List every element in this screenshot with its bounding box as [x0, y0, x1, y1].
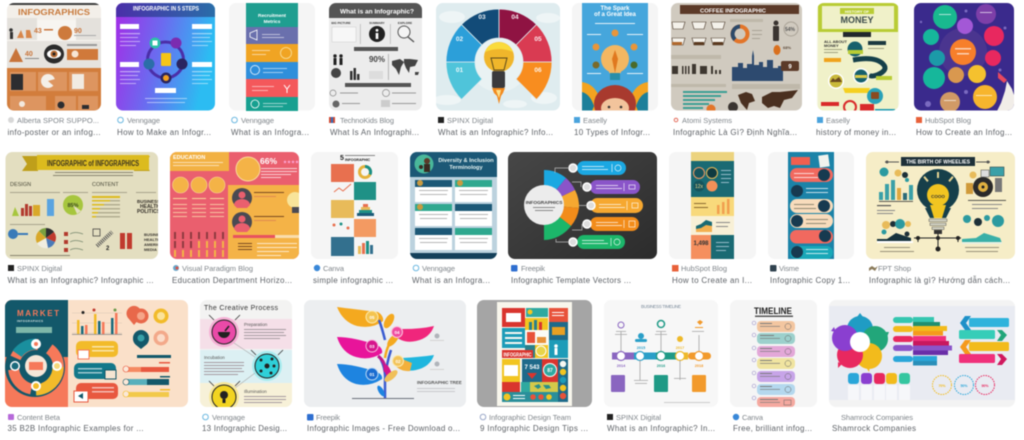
result card: Alberta SPOR info-poster — [7, 3, 101, 137]
thumbnail: business timeline — [604, 300, 718, 407]
caption: Infographic Là Gì? Định Nghĩa... — [673, 128, 797, 137]
result card: Infographic Design Team poster — [477, 300, 592, 433]
thumbnail: history of money: MONEY — [840, 15, 874, 25]
thumbnail: spark of a great idea: The Spark — [600, 6, 630, 12]
thumbnail: gray infographic: What is an Infographic? — [340, 8, 414, 16]
result card: SPINX light bulb ring — [433, 3, 560, 137]
thumbnail: history of money: HISTORY OF — [845, 9, 870, 14]
caption: What is an Infogra... — [412, 276, 490, 285]
caption — [869, 264, 1010, 285]
thumbnail: creative process: Illumination — [244, 389, 267, 394]
result card: SPINX business timeline — [604, 300, 718, 433]
thumbnail: creative process: Incubation — [204, 355, 225, 360]
result card: Content Beta market infographic — [5, 300, 188, 433]
caption: Venngage — [212, 413, 245, 422]
caption — [412, 264, 490, 285]
thumbnail: infographic tree: 03 — [369, 344, 375, 349]
thumbnail: infographic of infographics: AMERICA — [144, 242, 163, 247]
caption — [231, 116, 309, 137]
thumbnail: tall teal and yellow infographic: 1,498 — [693, 241, 709, 247]
caption: Shamrock Companies — [841, 413, 913, 422]
thumbnail: tall teal and yellow infographic — [669, 152, 756, 259]
thumbnail: mosaic poster on gray: INFOGRAPHIC — [504, 352, 532, 358]
thumbnail: coffee infographic: 54% — [785, 27, 796, 33]
thumbnail: history of money — [817, 3, 899, 113]
thumbnail: diversity and inclusion terminology: Diversity & Inclusion — [438, 158, 494, 164]
result card: TechnoKids what is an infographic — [329, 3, 422, 137]
thumbnail: six segment ring with rocket bulb: 02 — [456, 36, 463, 43]
caption: Infographic Template Vectors ... — [511, 276, 631, 285]
caption: Free, brilliant infog... — [733, 424, 812, 433]
thumbnail: education department horizontal: ★★★★ — [283, 159, 299, 164]
caption: Easelly — [583, 116, 607, 125]
thumbnail: business timeline: 2016 — [657, 364, 665, 368]
thumbnail: gray infographic: EXPLORE — [398, 21, 412, 25]
thumbnail: petals, bars and arrows: 90% — [981, 384, 989, 388]
result card: Visme infographic copy — [768, 152, 854, 285]
caption — [8, 116, 100, 137]
caption: SPINX Digital — [616, 413, 661, 422]
thumbnail: recruitment metrics: Metrics — [264, 19, 281, 25]
thumbnail: mosaic poster on gray — [477, 300, 592, 407]
thumbnail: infographic of infographics: HEALTH — [140, 204, 160, 210]
result card: Easelly history of money — [816, 3, 899, 137]
caption — [117, 116, 211, 137]
thumbnail: orange infographics poster: INFOGRAPHICS — [18, 8, 91, 17]
thumbnail: coffee infographic: 9 — [788, 64, 792, 70]
thumbnail: tall blue with pills — [768, 152, 854, 259]
thumbnail: business timeline: BUSINESS TIMELINE — [641, 304, 681, 309]
result card: Venngage diversity and inclusion — [410, 152, 497, 285]
thumbnail: spark of a great idea — [572, 3, 658, 123]
caption — [8, 413, 144, 433]
thumbnail: business timeline: 2018 — [695, 364, 703, 368]
caption: Venngage — [241, 116, 274, 125]
caption — [438, 116, 553, 137]
thumbnail: education department horizontal: EDUCATION — [173, 155, 205, 161]
caption — [916, 116, 1012, 137]
thumbnail: birth of wheelies light bulb: COOO — [931, 194, 945, 199]
caption: history of money in... — [816, 128, 896, 137]
thumbnail: market infographic: INFOGRAPHICS — [17, 319, 43, 323]
caption — [8, 264, 154, 285]
thumbnail: diversity and inclusion terminology — [410, 152, 497, 259]
thumbnail: business timeline: 2017 — [676, 346, 684, 350]
caption: How to Create an Infog... — [916, 128, 1012, 137]
thumbnail: business timeline: 2015 — [637, 346, 645, 350]
caption — [329, 116, 419, 137]
thumbnail: infographic of infographics: 2 — [106, 246, 110, 252]
thumbnail: simple colored blocks — [311, 152, 398, 259]
caption: 35 B2B Infographic Examples for ... — [8, 424, 144, 433]
caption — [832, 413, 916, 433]
caption: SPINX Digital — [447, 116, 493, 125]
caption — [480, 413, 588, 433]
thumbnail: six segment ring with rocket bulb: 06 — [534, 67, 542, 74]
thumbnail: six segment ring with rocket bulb: 01 — [456, 67, 463, 74]
ring segments — [446, 9, 552, 100]
caption — [172, 264, 292, 285]
caption: FPT Shop — [878, 264, 911, 273]
caption: info-poster or an infog... — [8, 128, 100, 137]
thumbnail: infographic of infographics: POLITICS — [137, 209, 161, 215]
caption — [202, 413, 287, 433]
result card: Visual Paradigm education — [170, 152, 303, 285]
result card: Easelly spark of a great idea — [572, 3, 658, 137]
caption: Canva — [323, 264, 345, 273]
thumbnail: birth of wheelies light bulb — [866, 152, 1015, 259]
result card: Canva simple infographic — [311, 152, 398, 285]
thumbnail: gray infographic: 90% — [369, 55, 385, 64]
caption: Education Department Horizo... — [172, 276, 292, 285]
caption: What Is An Infographi... — [330, 128, 419, 137]
caption: Infographic Design Team — [489, 413, 571, 422]
thumbnail: five step purple gradient: INFOGRAPHIC IN 5 STEPS — [133, 6, 200, 12]
result card: FPT Shop birth of wheelies — [866, 152, 1015, 285]
result card: Venngage creative process — [200, 300, 292, 433]
thumbnail: timeline design process: TIMELINE — [754, 306, 792, 317]
thumbnail: creative process: The Creative Process — [204, 305, 278, 312]
caption: 9 Infographic Design Tips ... — [480, 424, 588, 433]
thumbnail: infographic tree — [304, 300, 466, 407]
caption — [574, 116, 650, 137]
caption: What is an Infographic? Info... — [438, 128, 553, 137]
thumbnail: six segment ring with rocket bulb — [433, 3, 560, 111]
caption: HubSpot Blog — [925, 116, 971, 125]
result card: Venngage recruitment metrics — [229, 3, 315, 137]
thumbnail: diversity and inclusion terminology: Terminology — [449, 165, 483, 171]
thumbnail: gray infographic: BIG PICTURE — [331, 21, 351, 25]
thumbnail: creative process — [200, 300, 292, 412]
caption: Visual Paradigm Blog — [182, 264, 253, 273]
result card: Venngage 5 steps — [116, 3, 215, 137]
thumbnail: market infographic — [5, 300, 188, 407]
thumbnail: mosaic poster on gray: 7 543 — [524, 365, 540, 371]
caption: Venngage — [127, 116, 160, 125]
caption: What is an Infographic? Infographic ... — [8, 276, 154, 285]
caption — [607, 413, 715, 433]
caption — [511, 264, 631, 285]
caption: What is an Infographic? In... — [607, 424, 715, 433]
thumbnail: recruitment metrics — [229, 3, 315, 111]
caption: Freepik — [521, 264, 545, 273]
result card: HubSpot bubble infographic — [914, 3, 1014, 137]
thumbnail: gray infographic — [329, 3, 422, 111]
thumbnail: infographic of infographics: CONTENT — [92, 182, 119, 188]
caption: Shamrock Companies — [832, 424, 916, 433]
result card: HubSpot tall infographic — [669, 152, 756, 285]
caption: SPINX Digital — [17, 264, 62, 273]
thumbnail: tall teal and yellow infographic: 12x — [695, 184, 704, 190]
caption: Easelly — [826, 116, 850, 125]
thumbnail: spark of a great idea: of a Great Idea — [594, 12, 636, 18]
thumbnail: education department horizontal: 66% — [260, 156, 277, 166]
thumbnail: six segment ring with rocket bulb: 05 — [534, 36, 542, 43]
thumbnail: coffee infographic: 68% — [783, 45, 791, 50]
caption: 10 Types of Infogr... — [574, 128, 650, 137]
thumbnail: education department horizontal — [170, 152, 303, 259]
caption — [313, 264, 393, 285]
five petals — [831, 313, 889, 372]
result card: SPINX infographic of infographics — [6, 152, 165, 285]
thumbnail: market infographic: MARKET — [17, 309, 59, 318]
result card: Atomi coffee infographic — [671, 3, 802, 137]
thumbnail: simple colored blocks: 5 — [340, 155, 344, 162]
thumbnail: orange infographics poster: 43 — [34, 28, 42, 35]
caption — [673, 116, 797, 137]
thumbnail: infographic of infographics: HEALTH — [144, 237, 160, 242]
thumbnail: history of money: ALL ABOUT — [824, 39, 847, 44]
caption: Freepik — [316, 413, 340, 422]
thumbnail: semicircle with pills on dark — [508, 152, 657, 259]
caption: Infographic Copy 1... — [770, 276, 850, 285]
caption: Canva — [742, 413, 764, 422]
caption: Visme — [779, 264, 799, 273]
caption: How to Create an I... — [672, 276, 752, 285]
thumbnail: six segment ring with rocket bulb: 03 — [478, 14, 486, 21]
caption — [816, 116, 896, 137]
thumbnail: six segment ring with rocket bulb: 04 — [511, 14, 519, 21]
caption: 13 Infographic Desig... — [202, 424, 287, 433]
thumbnail: orange infographics poster: 90 — [74, 28, 82, 35]
thumbnail: recruitment metrics: Recruitment — [258, 13, 286, 19]
thumbnail: petals, bars and arrows: 50% — [960, 384, 968, 388]
thumbnail: infographic of infographics — [6, 152, 165, 259]
caption — [733, 413, 812, 433]
thumbnail: infographic tree: 01 — [369, 372, 375, 377]
pills — [577, 161, 643, 249]
thumbnail: orange infographics poster: 40 — [25, 51, 33, 58]
result card: Freepik infographic template — [508, 152, 657, 285]
result card: Shamrock Companies — [829, 300, 1015, 433]
caption: Alberta SPOR SUPPO... — [17, 116, 99, 125]
thumbnail: coffee infographic — [671, 3, 802, 114]
thumbnail: business timeline: 2014 — [617, 364, 626, 368]
thumbnail: petals, bars and arrows — [829, 300, 1015, 407]
caption: Infographic Images - Free Download o... — [307, 424, 460, 433]
caption — [307, 413, 460, 433]
thumbnail: infographic of infographics: BUSINESS — [144, 232, 165, 237]
caption: TechnoKids Blog — [340, 116, 394, 125]
thumbnail: infographic of infographics: BUSINESS — [137, 199, 160, 204]
thumbnail: infographic tree: 02 — [395, 359, 401, 364]
thumbnail: simple colored blocks: INFOGRAPHIC — [345, 158, 371, 162]
caption — [672, 264, 752, 285]
thumbnail: orange infographics poster — [7, 3, 101, 111]
thumbnail: semicircle with pills on dark: INFOGRAPHICS — [526, 200, 563, 206]
thumbnail: infographic of infographics: MEDIA — [144, 247, 157, 252]
thumbnail: infographic of infographics: DESIGN — [10, 182, 31, 188]
result card: Canva timeline — [730, 300, 817, 433]
caption: Atomi Systems — [682, 116, 732, 125]
caption: Infographic là gì? Hướng dẫn cách... — [869, 276, 1010, 285]
caption: HubSpot Blog — [681, 264, 727, 273]
thumbnail: infographic of infographics: 85% — [67, 203, 79, 209]
result card: Freepik infographic tree — [304, 300, 466, 433]
thumbnail: bubbles on purple — [914, 3, 1014, 112]
thumbnail: petals, bars and arrows: 70% — [938, 384, 946, 388]
thumbnail: infographic tree: 05 — [369, 315, 375, 320]
thumbnail: creative process: Preparation — [244, 322, 268, 327]
thumbnail: infographic tree: INFOGRAPHIC TREE — [417, 380, 462, 385]
thumbnail: coffee infographic: COFFEE INFOGRAPHIC — [700, 8, 767, 14]
thumbnail: infographic of infographics: INFOGRAPHIC of INFOGRAPHICS — [47, 159, 139, 168]
thumbnail: birth of wheelies light bulb: THE BIRTH OF WHEELIES — [906, 160, 970, 166]
caption: How to Make an Infogr... — [117, 128, 211, 137]
caption — [770, 264, 850, 285]
caption: Content Beta — [17, 413, 61, 422]
thumbnail: gray infographic: SUMMARY — [369, 21, 385, 25]
caption: Venngage — [422, 264, 455, 273]
thumbnail: mosaic poster on gray: 87 — [547, 368, 553, 374]
thumbnail: infographic tree: 04 — [394, 330, 400, 335]
caption: simple infographic ... — [313, 276, 393, 285]
caption: What is an Infogra... — [231, 128, 309, 137]
thumbnail: history of money: MONEY — [824, 43, 839, 48]
